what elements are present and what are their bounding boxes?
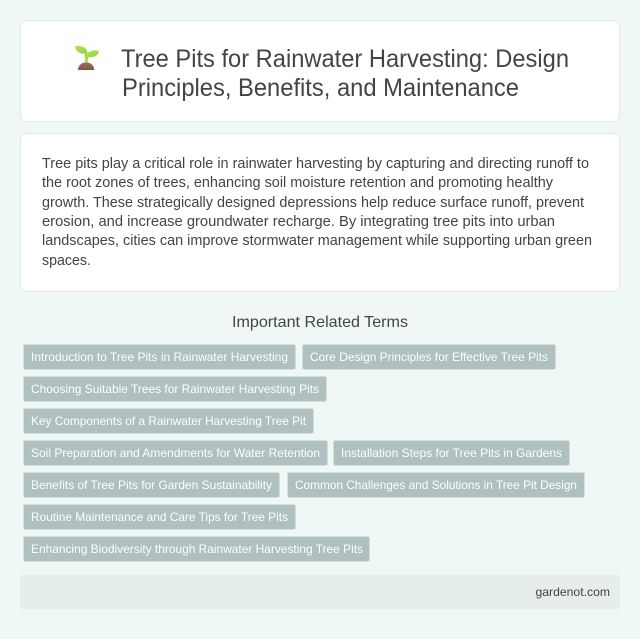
tag 1 xyxy=(24,344,296,370)
tag 3 xyxy=(24,376,326,402)
tag 7 xyxy=(24,472,280,498)
tag 9 xyxy=(24,504,296,530)
tag 9: Routine Maintenance and Care Tips for Tree Pits xyxy=(31,510,288,524)
heading: related terms: Important Related Terms xyxy=(232,314,408,331)
tag 1: Introduction to Tree Pits in Rainwater Harvesting xyxy=(31,350,288,364)
panel: intro text xyxy=(20,134,620,292)
tag 4: Key Components of a Rainwater Harvesting Tree Pit xyxy=(31,414,307,428)
icon: seedling xyxy=(75,46,99,70)
tag list xyxy=(24,344,584,562)
intro paragraph: growth. These strategically designed depressions help reduce surface runoff, prevent xyxy=(42,195,584,211)
panel: title card xyxy=(20,20,620,122)
intro paragraph: the root zones of trees, enhancing soil moisture retention and promoting healthy xyxy=(42,175,554,191)
intro paragraph: spaces. xyxy=(42,253,91,269)
tag 7: Benefits of Tree Pits for Garden Sustainability xyxy=(31,478,272,492)
tag 6 xyxy=(334,440,570,466)
intro paragraph: erosion, and increase groundwater recharge. By integrating tree pits into urban xyxy=(42,214,555,230)
tag 8: Common Challenges and Solutions in Tree Pit Design xyxy=(295,478,577,492)
tag 4 xyxy=(24,408,314,434)
tag 10: Enhancing Biodiversity through Rainwater Harvesting Tree Pits xyxy=(31,542,363,556)
tag 2: Core Design Principles for Effective Tree Pits xyxy=(310,350,548,364)
tag 5 xyxy=(24,440,328,466)
intro paragraph xyxy=(42,156,592,269)
title: Principles, Benefits, and Maintenance xyxy=(122,74,519,102)
tag 2 xyxy=(302,344,556,370)
tag 8 xyxy=(288,472,584,498)
tag 5: Soil Preparation and Amendments for Water Retention xyxy=(31,446,320,460)
title xyxy=(121,45,569,102)
footer source text: gardenot.com xyxy=(536,585,610,599)
tag 6: Installation Steps for Tree Pits in Gardens xyxy=(341,446,562,460)
tag 3: Choosing Suitable Trees for Rainwater Harvesting Pits xyxy=(31,382,319,396)
title: Tree Pits for Rainwater Harvesting: Design xyxy=(121,45,569,73)
intro paragraph: landscapes, cities can improve stormwater management while supporting urban green xyxy=(42,233,592,249)
tag 10 xyxy=(24,536,370,562)
intro paragraph: Tree pits play a critical role in rainwater harvesting by capturing and directing runoff to xyxy=(42,156,589,172)
footer xyxy=(20,575,620,609)
